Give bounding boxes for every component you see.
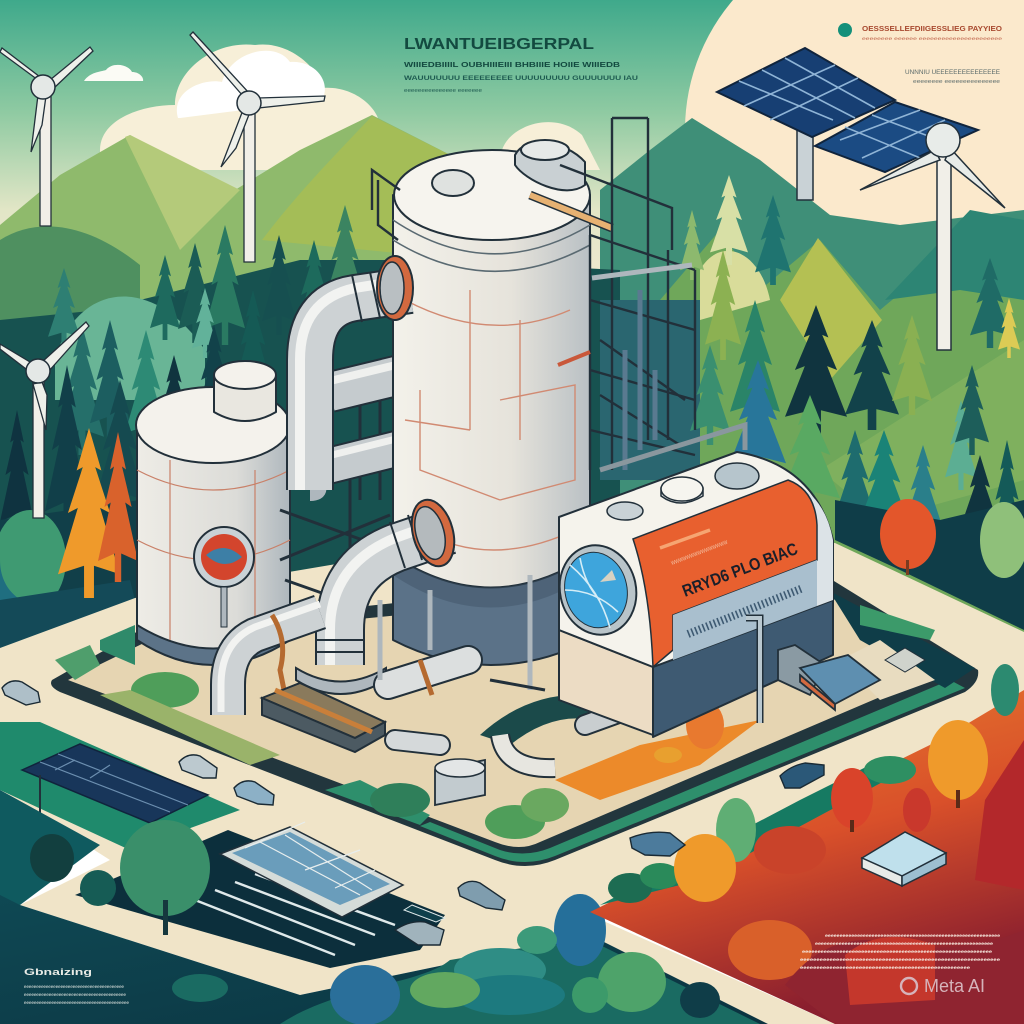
legend note: UNNNIU UEEEEEEEEEEEEEEE [905, 70, 1000, 76]
platform [51, 560, 978, 866]
note body line 3: eeeeeeeeeeeeeeeeeeeeeeeeeeeeeeeeeeeeeeeeee [24, 1000, 129, 1005]
legend dot [838, 23, 852, 37]
generator window glass [558, 546, 634, 634]
outlet pipe light [746, 618, 760, 723]
lower pipe elbow [296, 495, 461, 694]
sky background [0, 0, 1024, 280]
bushes bottom centre [172, 894, 760, 1024]
small tank base behind [137, 470, 290, 665]
mountains left [0, 115, 480, 330]
generator orange panel [633, 480, 817, 667]
top right legend [838, 23, 1003, 85]
note line 5: eeeeeeeeeeeeeeeeeeeeeeeeeeeeeeeeeeeeeeeeeeeeeeeeeeee [800, 966, 970, 971]
generator navy base [653, 600, 833, 737]
generator lower beige [559, 630, 653, 735]
clouds [84, 44, 600, 170]
small front pipes and machines [380, 575, 632, 805]
title [404, 36, 638, 94]
orange field right [590, 690, 1024, 1024]
generator label strip [673, 560, 817, 660]
generator shell [559, 452, 833, 667]
parking canopy solar panels [220, 822, 403, 917]
piping between tanks [280, 400, 390, 640]
forest trees right [600, 175, 1024, 630]
watermark: Meta AI [924, 976, 985, 996]
wind turbine lower left [0, 322, 89, 518]
legend title: OESSSELLEFDIIGESSLIEG PAYYIEO [862, 24, 1002, 33]
autumn trees left [58, 428, 138, 598]
small building [862, 832, 946, 886]
forest base left [0, 260, 620, 660]
legend note line 2: eeeeeeee eeeeeeeeeeeeeee [913, 79, 1000, 85]
generator unit [551, 452, 833, 737]
left tank [136, 361, 290, 648]
note line 3: eeeeeeeeeeeeeeeeeeeeeeeeeeeeeeeeeeeeeeeeeeeeeeeeeeeeeeeeeeeee [802, 950, 992, 955]
bottom navy ground [0, 870, 768, 1024]
bottom right note [800, 934, 1000, 971]
solar field left [22, 744, 208, 825]
generator highlight [660, 530, 710, 548]
roof vent [515, 140, 612, 228]
legend subtitle: eeeeeeee eeeeee eeeeeeeeeeeeeeeeeeeeee [862, 36, 1003, 41]
note line 1: eeeeeeeeeeeeeeeeeeeeeeeeeeeeeeeeeeeeeeeeeeeeeeeeeeeeeeeeeeee [825, 934, 1000, 939]
title subheading: WIIIEDBIIIIL OUBHIIIEIII BHBIIIE HOIIE WIIIEDB [404, 60, 621, 69]
scaffold tower [372, 118, 745, 470]
parking lot [75, 830, 445, 968]
middle pipes [310, 364, 400, 495]
main tank [393, 150, 590, 608]
ground equipment right of generator [778, 645, 880, 710]
main tank base [393, 520, 590, 665]
skid base [262, 683, 385, 752]
green field left [0, 722, 240, 850]
small gray pad [885, 648, 925, 672]
note line 2: eeeeeeeeeeeeeeeeeeeeeeeeeeeeeeeeeeeeeeeeeeeeeeeeeeeeeeeeeeee [815, 942, 993, 947]
title heading: LWANTUEIBGERPAL [404, 36, 594, 53]
light hill left [55, 296, 205, 400]
note body: eeeeeeeeeeeeeeeeeeeeeeeeeeeeeeeeeeeeeeeee [24, 984, 124, 989]
platform patches [55, 625, 760, 839]
generator label text: RRYD6 PLO BIAC [680, 539, 800, 601]
forest trees left [0, 205, 365, 648]
mountains right [600, 118, 1024, 640]
big green trees lot [30, 820, 210, 935]
wind turbine top left [0, 47, 93, 226]
generator stripes [688, 588, 803, 634]
note line 4: eeeeeeeeeeeeeeeeeeeeeeeeeeeeeeeeeeeeeeeeeeeeeeeeeeeeeeeeeeeee [800, 958, 1000, 963]
title footnote: eeeeeeeeeeeeeee eeeeeee [404, 88, 482, 94]
dark left green bottom [0, 790, 100, 905]
wind turbine top centre [190, 32, 325, 262]
left lower pipe [221, 604, 320, 715]
note body line 2: eeeeeeeeeeeeeeeeeeeeeeeeeeeeeeeeeeeeeeeee [24, 992, 126, 997]
generator right cap shade [788, 480, 833, 606]
generator caps [607, 463, 759, 520]
gauge on left tank [194, 527, 254, 627]
cream sun disc [685, 0, 1024, 330]
wind turbine right [860, 123, 1005, 350]
cream ground and roads [0, 543, 1024, 1024]
field decoration green hedge [600, 756, 916, 905]
generator outlet pipe [746, 618, 760, 723]
bottom left note [24, 967, 129, 1005]
title description: WAUUUUUUU EEEEEEEEE UUUUUUUUU GUUUUUUU IAU [404, 75, 638, 82]
generator small text: wwwwwwwwwwwwwww [669, 539, 729, 567]
cars [2, 681, 824, 945]
note heading: Gbnaizing [24, 967, 92, 977]
upper pipe elbow [300, 256, 413, 490]
field autumn trees [674, 664, 1024, 1024]
generator window [551, 538, 645, 642]
solar array top right [717, 48, 978, 200]
